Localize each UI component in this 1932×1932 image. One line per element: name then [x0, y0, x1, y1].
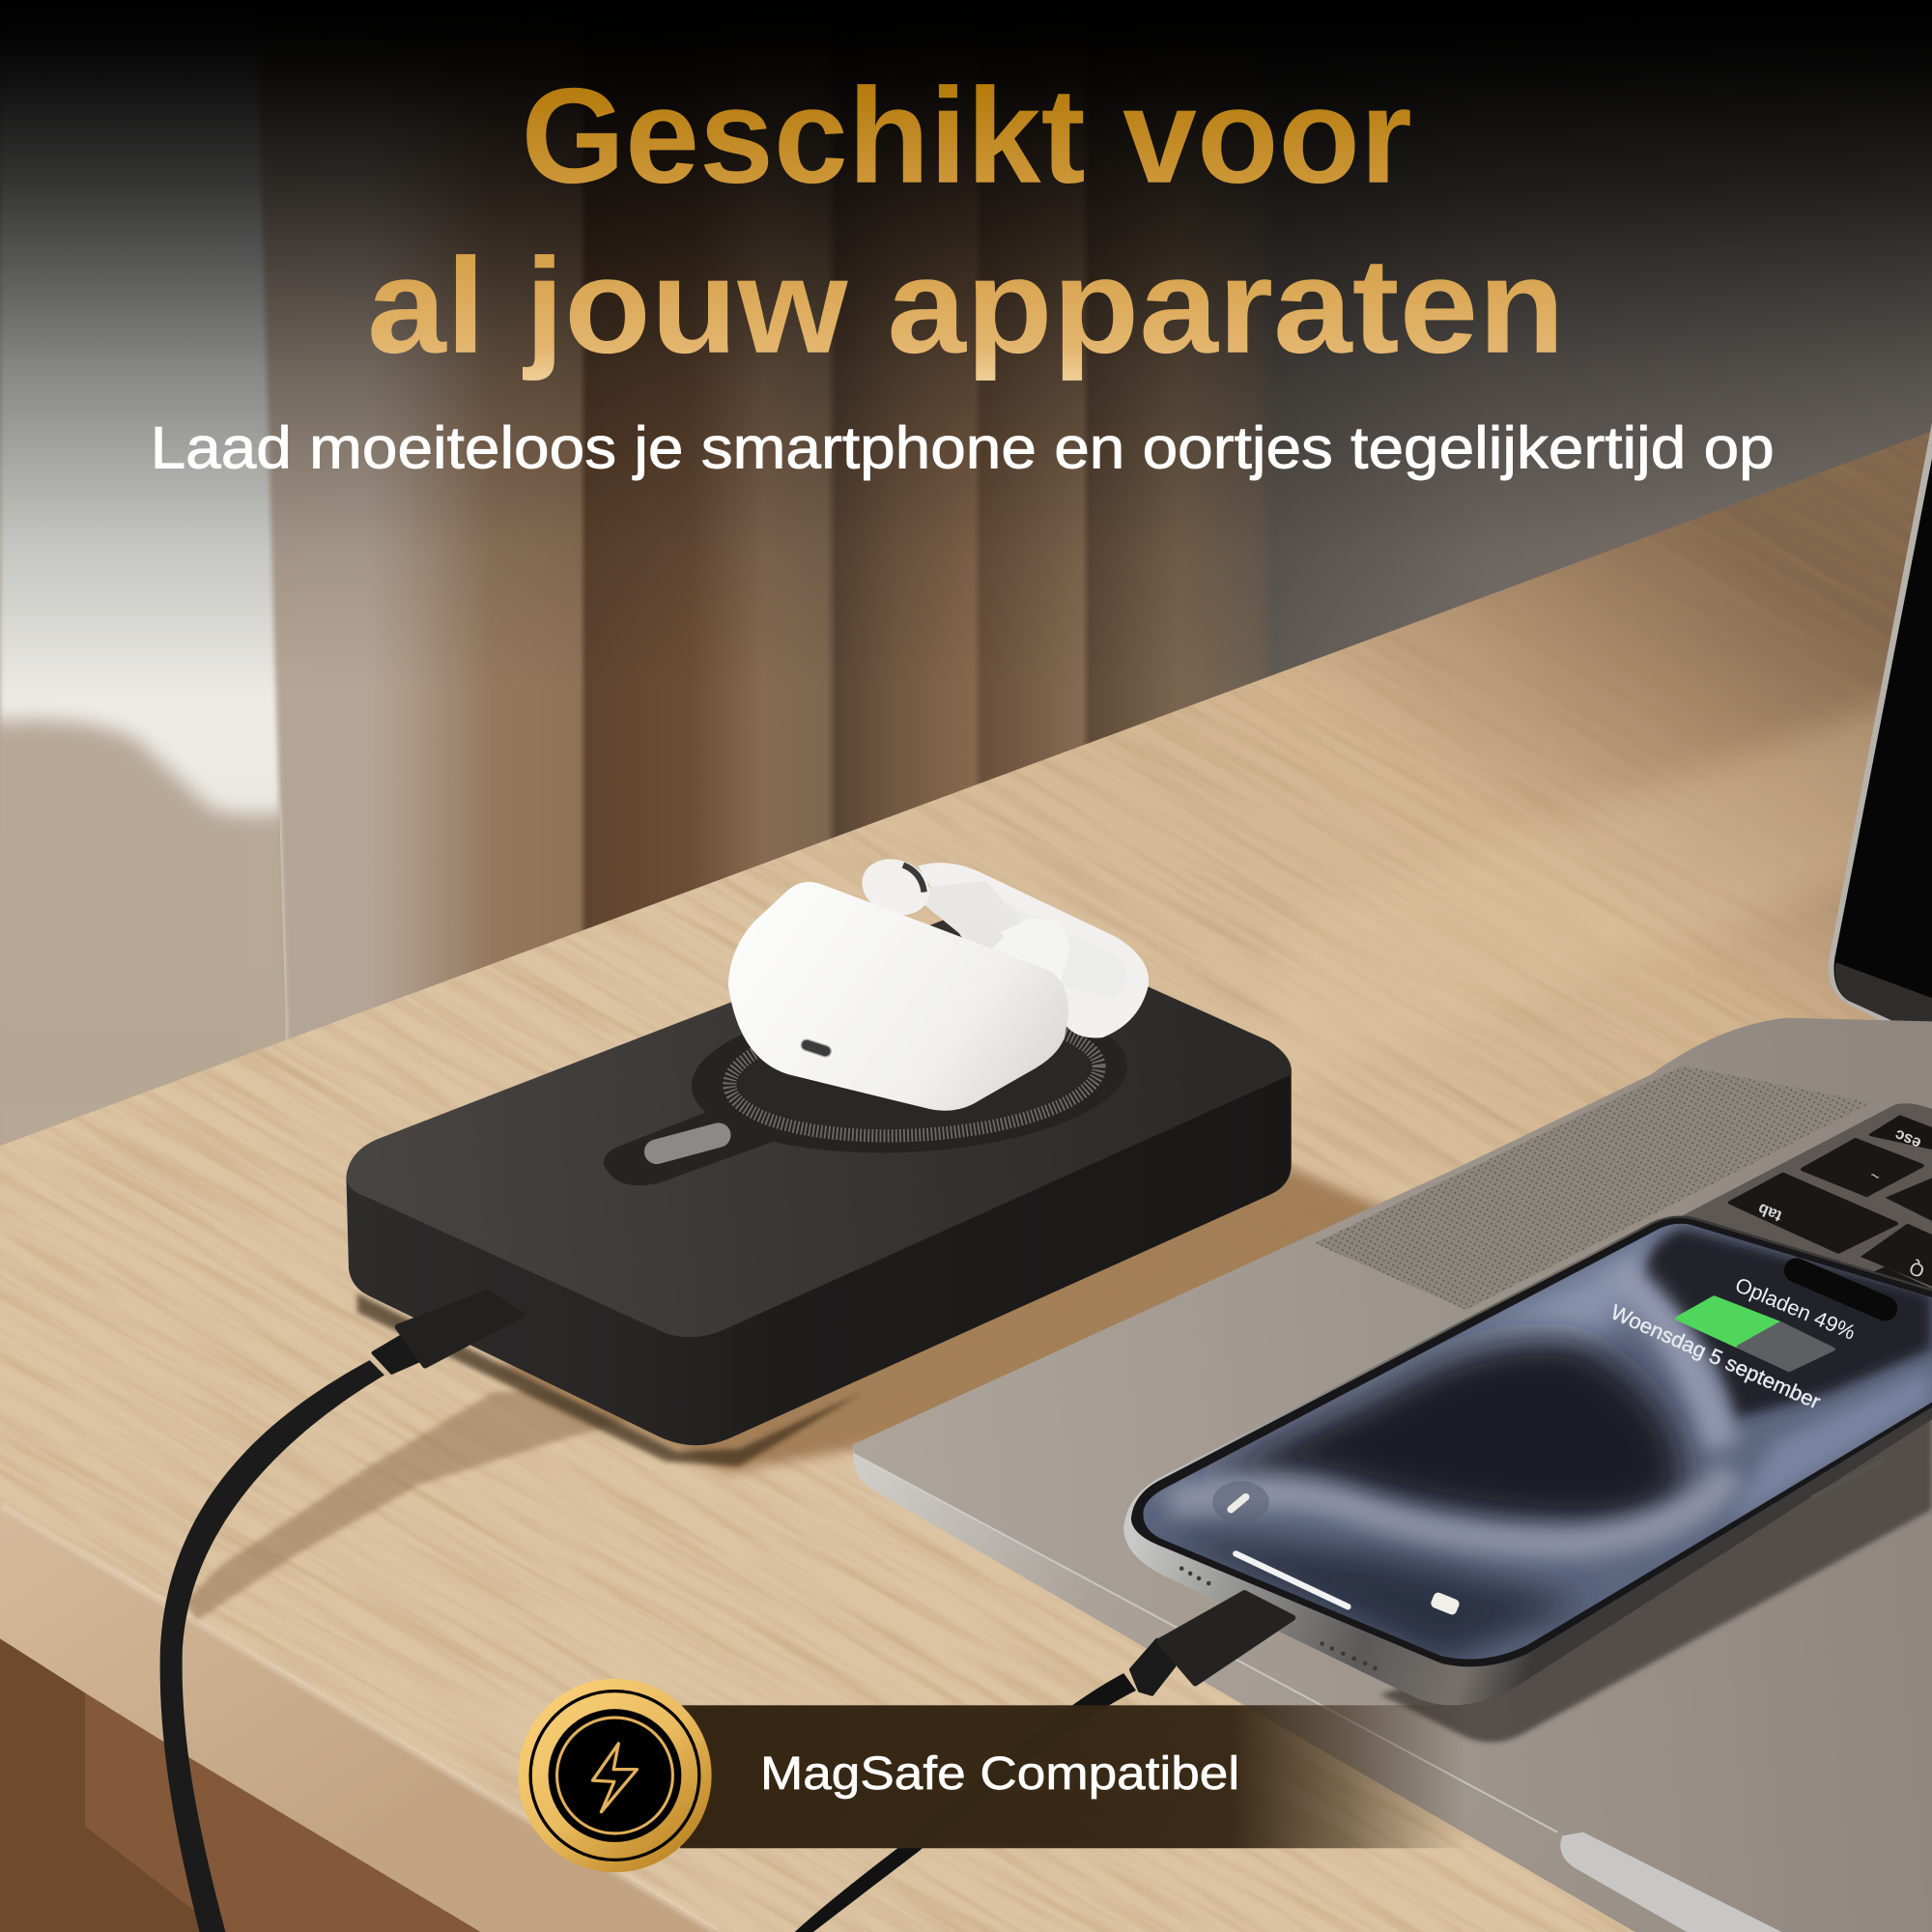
camera button: [1430, 1591, 1461, 1616]
desk top surface: [0, 431, 1932, 1932]
left earbud: [854, 850, 937, 924]
indicator pill: [641, 1120, 733, 1167]
magnetic ring with handle: [604, 988, 1131, 1185]
power bank top: [346, 914, 1292, 1337]
title: Geschikt voor: [522, 60, 1412, 212]
open case lid: [918, 863, 1149, 1037]
callout: MagSafe badge: [518, 1679, 1468, 1872]
laptop keyboard: [1672, 1103, 1932, 1306]
laptop base: [853, 1018, 1932, 1932]
icon: lightning bolt: [593, 1744, 637, 1812]
phone speaker holes: [1179, 1566, 1378, 1670]
power bank: [346, 914, 1292, 1445]
title: al jouw apparaten: [367, 230, 1565, 382]
key: tab: [1730, 1175, 1896, 1252]
phone side button: [1814, 1462, 1880, 1497]
key: Q: Q: [1907, 1257, 1928, 1281]
right earbud: [961, 919, 1069, 985]
key: tab: tab: [1755, 1200, 1784, 1226]
title: [367, 60, 1565, 382]
key: esc: esc: [1891, 1125, 1923, 1153]
case body: [728, 882, 1068, 1111]
laptop edge notch: [1560, 1833, 1781, 1932]
dynamic island: [1797, 1270, 1886, 1309]
key: Q: [1861, 1224, 1932, 1287]
gold medallion icon: [518, 1679, 712, 1872]
phone screen wallpaper: [1143, 1223, 1932, 1660]
case interior between the earbuds: [906, 881, 1062, 967]
USB-C port: [800, 1038, 833, 1058]
earbuds case: [728, 850, 1149, 1111]
phone body: [1123, 1216, 1932, 1705]
phone charging cable: [795, 1593, 1293, 1932]
laptop screen: [1829, 423, 1932, 1047]
callout text: MagSafe Compatibel: [760, 1747, 1239, 1800]
charging status: Opladen 49%: [1732, 1272, 1860, 1345]
laptop speaker grille: [1315, 1065, 1872, 1310]
home bar: [1236, 1553, 1348, 1606]
power bank cable and connector: [160, 1293, 522, 1932]
subtitle: Laad moeiteloos je smartphone en oortjes tegelijkertijd op: [151, 415, 1775, 481]
shadow of power bank on desk: [185, 1164, 1399, 1620]
callout bar: [680, 1705, 1468, 1848]
background: window and curtain wall: [0, 51, 1932, 1146]
desk front edge and legs: [0, 1504, 719, 1932]
key: tilde: ~: [1867, 1166, 1883, 1186]
key: tilde: [1803, 1140, 1922, 1195]
battery indicator: [1677, 1297, 1833, 1370]
flashlight button: [1212, 1481, 1269, 1523]
key: esc: [1870, 1117, 1932, 1153]
date: Woensdag 5 september: [1607, 1299, 1824, 1414]
power bank sides: [346, 1072, 1292, 1445]
phone: [1109, 1195, 1932, 1705]
shadow of phone on laptop: [1380, 1392, 1932, 1743]
